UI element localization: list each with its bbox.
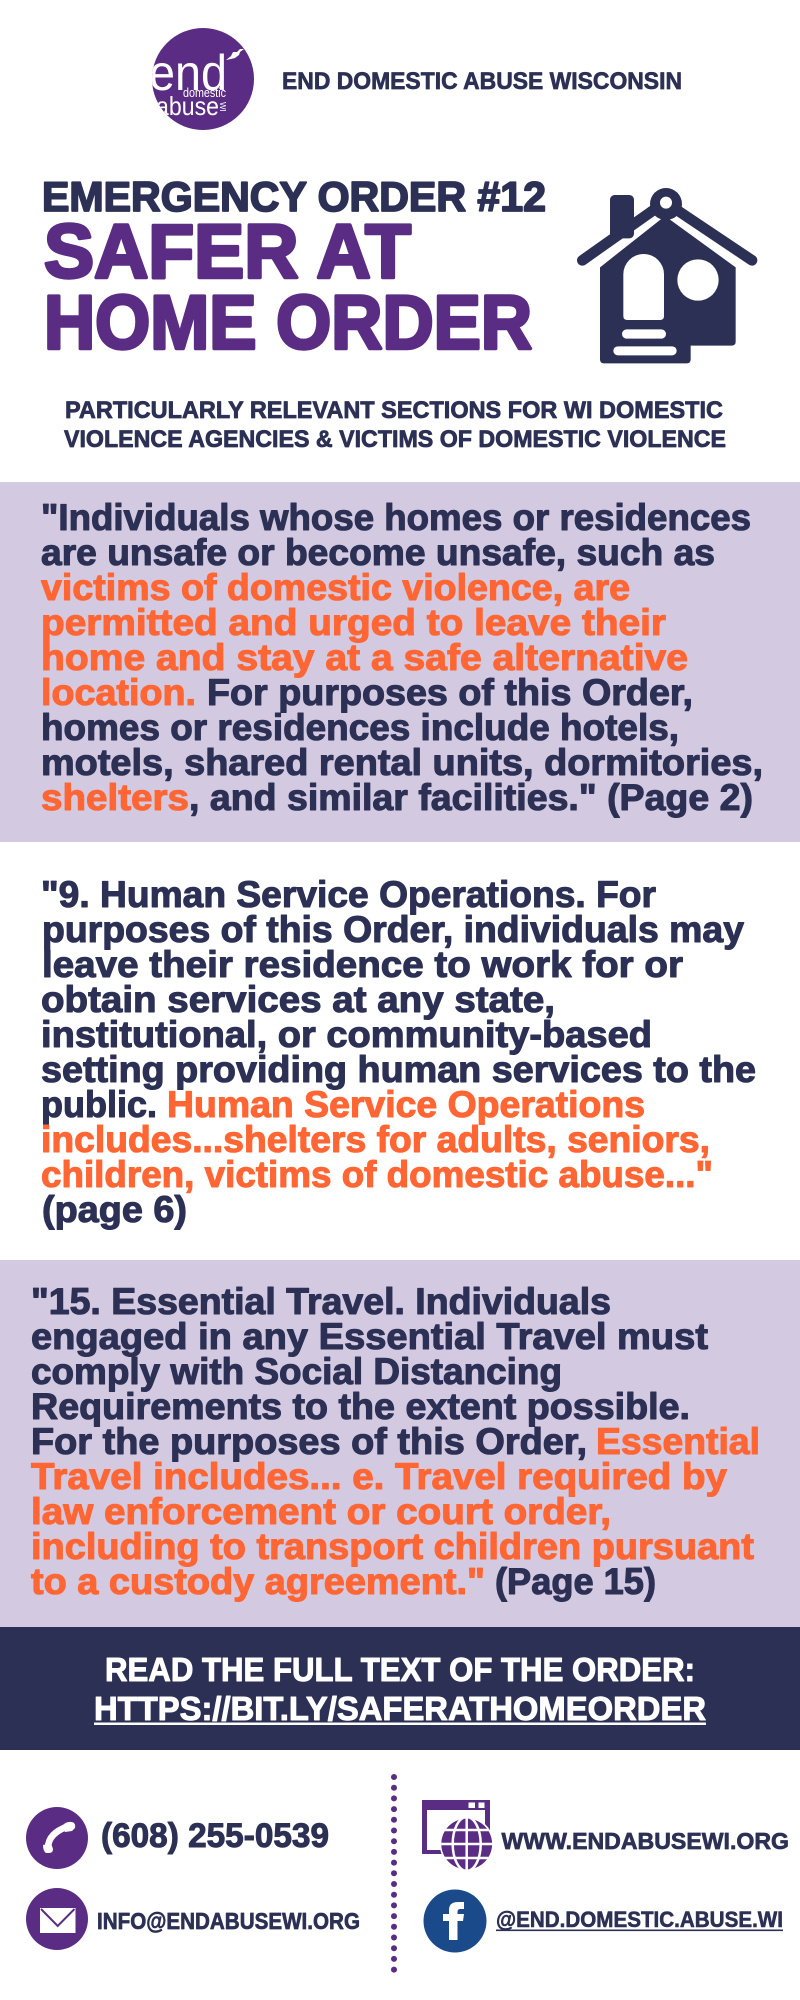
quote text: page 6: public. [41,1084,157,1125]
quote text: page 6: children, victims of domestic abuse..." [41,1154,713,1195]
quote text: page 15: engaged in any Essential Travel must [31,1316,708,1357]
quote text: page 6: Human Service Operations [167,1084,645,1125]
icon: End Domestic Abuse WI logo: abuse [156,91,219,121]
footer: contact details [26,1774,789,1973]
icon: phone [26,1807,88,1869]
quote text: page 2: motels, shared rental units, dormitories, [41,742,763,783]
quote text: page 15: Requirements to the extent possible. [31,1386,690,1427]
banner heading: READ THE FULL TEXT OF THE ORDER: [105,1651,695,1688]
quote text: page 6: leave their residence to work for or [42,944,683,985]
quote text: page 2: home and stay at a safe alternative [41,637,688,678]
icon: End Domestic Abuse WI logo [149,28,254,130]
quote text: page 6: setting providing human services to the [41,1049,756,1090]
quote text: page 15: Essential [596,1421,760,1462]
quote text: page 2: location. [41,672,196,713]
facebook handle with underline: @END.DOMESTIC.ABUSE.WI [496,1907,783,1932]
quote text: page 2: homes or residences include hotels, [41,707,679,748]
quote text: page 15: "15. Essential Travel. Individuals [31,1281,611,1322]
quote text: page 6: institutional, or community-based [41,1014,652,1055]
phone number: (608) 255-0539 [101,1817,329,1855]
panel: quote on human service operations [0,842,800,1260]
quote text: page 2: For purposes of this Order, [207,672,693,713]
quote text: page 15: comply with Social Distancing [31,1351,562,1392]
icon: End Domestic Abuse WI logo: domestic [183,85,226,100]
icon: facebook [424,1890,486,1952]
banner: read the full text [0,1627,800,1750]
quote text: page 2 [41,497,763,818]
icon: envelope [26,1888,88,1950]
icon: browser window with globe [422,1800,496,1873]
quote text: page 2: victims of domestic violence, are [41,567,630,608]
quote text: page 6: obtain services at any state, [41,979,555,1020]
subtitle: VIOLENCE AGENCIES & VICTIMS OF DOMESTIC VIOLENCE [64,426,726,453]
icon: End Domestic Abuse WI logo: end [149,45,227,101]
main title line 1: SAFER AT [44,210,411,294]
quote text: page 2: "Individuals whose homes or residences [41,497,751,538]
main title line 2: HOME ORDER [44,280,532,366]
quote text: page 2: permitted and urged to leave their [41,602,666,643]
quote text: page 6: purposes of this Order, individuals may [42,909,744,950]
panel: quote on victims leaving unsafe homes [0,482,800,842]
panel: quote on essential travel [0,1260,800,1627]
header: organisation logo and name [149,28,682,130]
dotted divider [391,1774,397,1973]
quote text: page 15: (Page 15) [495,1561,656,1602]
quote text: page 15: law enforcement or court order, [31,1491,611,1532]
quote text: page 15: For the purposes of this Order, [31,1421,587,1462]
banner link with underline: HTTPS://BIT.LY/SAFERATHOMEORDER [94,1690,706,1727]
quote text: page 2: are unsafe or become unsafe, such as [41,532,715,573]
quote text: page 15: to a custody agreement." [31,1561,485,1602]
quote text: page 6: "9. Human Service Operations. For [41,874,656,915]
subtitle [64,397,726,453]
title line: emergency order number: EMERGENCY ORDER #12 [42,173,546,220]
icon: house [582,188,752,363]
quote text: page 6: includes...shelters for adults, seniors, [41,1119,710,1160]
quote text: page 2: , and similar facilities." (Page 2) [189,777,753,818]
quote text: page 15: Travel includes... e. Travel required by [31,1456,727,1497]
quote text: page 15: including to transport children pursuant [31,1526,754,1567]
quote text: page 6 [41,874,756,1230]
organisation name: END DOMESTIC ABUSE WISCONSIN [282,68,682,95]
subtitle: PARTICULARLY RELEVANT SECTIONS FOR WI DOMESTIC [65,397,723,424]
quote text: page 15 [31,1281,760,1602]
website address: WWW.ENDABUSEWI.ORG [502,1828,789,1854]
quote text: page 6: (page 6) [42,1189,187,1230]
icon: End Domestic Abuse WI logo: WI [218,102,227,112]
title block [42,173,546,366]
quote text: page 2: shelters [41,777,189,818]
email address: INFO@ENDABUSEWI.ORG [97,1908,360,1934]
